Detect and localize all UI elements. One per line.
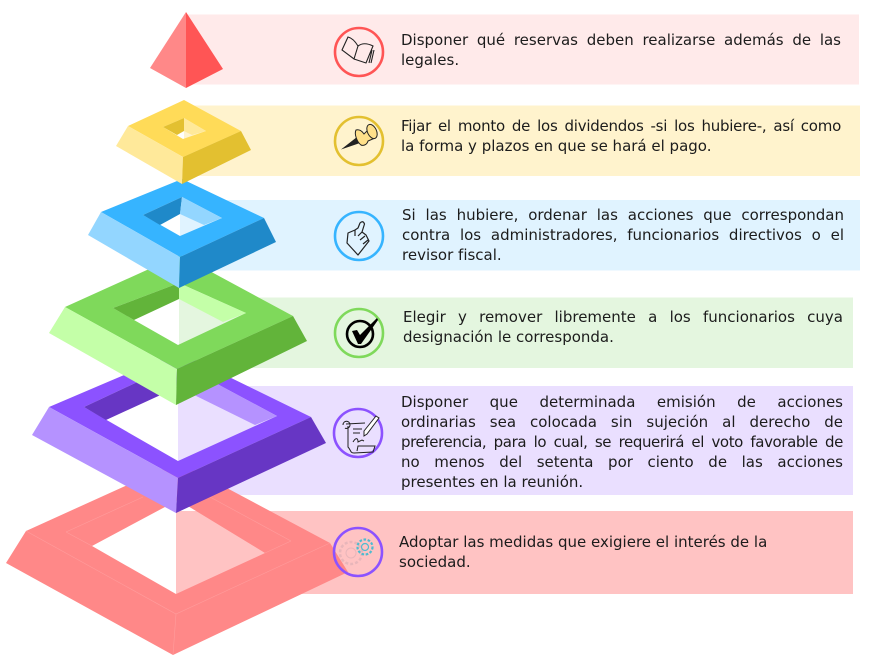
text block 3: contra los administradores, funcionarios directivos o el xyxy=(402,226,844,244)
icon: open book xyxy=(335,28,383,76)
icon: pointing hand xyxy=(335,212,383,260)
pyramid level 1: red apex xyxy=(150,12,223,88)
text block 5: presentes en la reunión. xyxy=(401,473,583,491)
text block 1 xyxy=(401,31,841,69)
text block 4: designación le corresponda. xyxy=(403,328,614,346)
text block 3: revisor fiscal. xyxy=(402,246,502,264)
band 3 background xyxy=(180,200,860,270)
band 1 background xyxy=(186,14,859,84)
pyramid level 5: purple ring xyxy=(32,352,326,513)
text block 6: Adoptar las medidas que exigiere el interés de la xyxy=(399,533,767,551)
pyramid level 2: yellow ring xyxy=(116,100,251,184)
band 5 background xyxy=(178,386,853,495)
band 2 background xyxy=(184,106,860,176)
icon: scroll and pen xyxy=(334,409,382,457)
text block 1: legales. xyxy=(401,51,459,69)
pyramid level 4: green ring xyxy=(49,255,307,405)
band 4 background xyxy=(179,298,853,368)
text block 3 xyxy=(402,206,844,264)
text block 4: Elegir y remover libremente a los funcionarios cuya xyxy=(403,308,843,326)
text block 5: Disponer que determinada emisión de acciones xyxy=(401,393,843,411)
pyramid level 3: blue ring xyxy=(88,179,276,288)
text block 5: preferencia, para lo cual, se requerirá el voto favorable de xyxy=(401,433,843,451)
text block 2: la forma y plazos en que se hará el pago. xyxy=(401,137,711,155)
text block 4 xyxy=(403,308,843,346)
pyramid level 6: red ring xyxy=(6,462,348,655)
text block 1: Disponer qué reservas deben realizarse además de las xyxy=(401,31,841,49)
icon: gears xyxy=(334,528,382,576)
text block 5: ordinarias sea colocada sin sujeción al derecho de xyxy=(401,413,843,431)
icon: check mark xyxy=(335,309,383,357)
text block 5: no menos del setenta por ciento de las acciones xyxy=(401,453,843,471)
band 6 background xyxy=(176,511,853,594)
icon: push pin xyxy=(335,117,383,165)
text block 6 xyxy=(399,533,767,571)
text block 6: sociedad. xyxy=(399,553,471,571)
text block 5 xyxy=(401,393,843,491)
text block 3: Si las hubiere, ordenar las acciones que correspondan xyxy=(402,206,844,224)
text block 2 xyxy=(401,117,841,155)
text block 2: Fijar el monto de los dividendos -si los hubiere-, así como xyxy=(401,117,841,135)
